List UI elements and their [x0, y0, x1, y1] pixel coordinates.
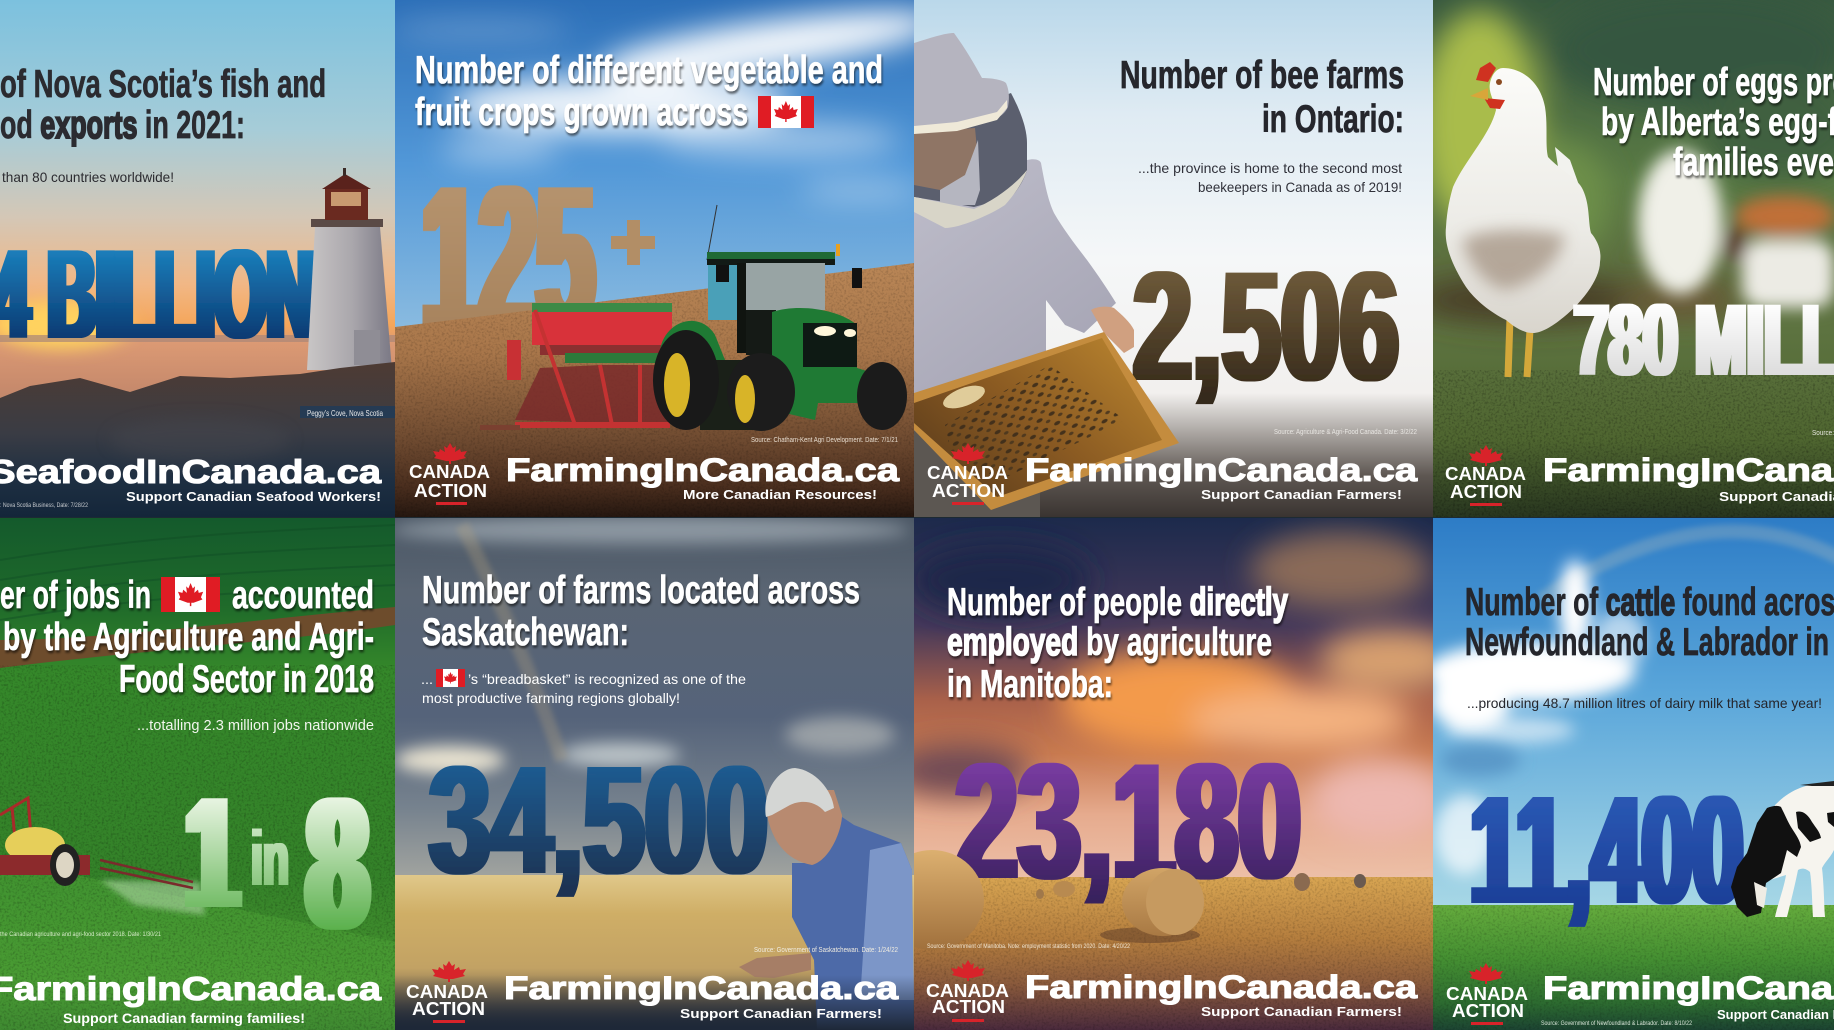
heading: od exports in 2021: [0, 104, 245, 147]
source: the Canadian agriculture and agri-food sector 2018. Date: 1/30/21 [0, 932, 162, 938]
panel: Ontario bee farms [914, 0, 1433, 517]
logo: Canada Action: ACTION [932, 997, 1005, 1017]
heading [947, 581, 1288, 706]
clouds and rainbow [1425, 531, 1834, 875]
logo: Canada Action [409, 443, 490, 505]
brown soil band [0, 607, 395, 668]
heading: in Ontario: [1262, 98, 1404, 141]
panel: Nova Scotia seafood exports [0, 0, 395, 517]
heading: Number of bee farms [1120, 54, 1404, 97]
heading: fruit crops grown across [415, 91, 748, 134]
tagline: More Canadian Resources! [683, 487, 877, 502]
big number: 1 in 8: in [251, 814, 289, 902]
tagline: Support Canadian Farmers! [680, 1006, 882, 1021]
bottom shade [395, 975, 914, 1030]
subheading with flag [421, 669, 746, 706]
logo: Canada Action: CANADA [927, 463, 1008, 483]
subheading: ...the province is home to the second most [1138, 160, 1402, 176]
grass [1433, 905, 1834, 1030]
heading with flag: Food Sector in 2018 [119, 658, 374, 701]
logo: Canada Action [1446, 963, 1528, 1025]
logo: Canada Action: CANADA [1445, 464, 1526, 484]
heading [1593, 61, 1834, 184]
source: Source: Chatham-Kent Agri Development. Date: 7/1/21 [751, 437, 898, 444]
big number: 34,500: 34,500 [429, 734, 768, 906]
subheading: than 80 countries worldwide! [2, 169, 174, 185]
source: : Nova Scotia Business, Date: 7/28/22 [0, 503, 89, 509]
ground texture [1433, 370, 1834, 517]
icon: honeycomb frame with bees [914, 332, 1179, 510]
subheading with flag: ’s “breadbasket” is recognized as one of the [468, 671, 746, 687]
photo caption [300, 406, 395, 418]
logo: Canada Action [1445, 445, 1526, 506]
icon: Canadian flag [161, 577, 220, 612]
tagline: Support Canadian farming families! [63, 1011, 305, 1026]
heading [1122, 59, 1404, 133]
subheading: ...totalling 2.3 million jobs nationwide [137, 717, 374, 734]
heading with flag: er of jobs in [0, 574, 151, 617]
heading: in Manitoba: [947, 663, 1113, 706]
panel: vegetable and fruit crops [390, 0, 942, 517]
soil [395, 263, 914, 517]
heading: Number of people directly [947, 581, 1288, 624]
source: Source: Government of Manitoba. Note: employment statistic from 2020. Date: 4/20/22 [927, 943, 1130, 950]
heading [0, 63, 326, 147]
logo: Canada Action: CANADA [926, 981, 1009, 1001]
icon: Canadian flag [758, 96, 814, 128]
subheading with flag: most productive farming regions globally! [422, 690, 680, 706]
field [914, 877, 1433, 1030]
panel: Newfoundland and Labrador cattle [1425, 518, 1834, 1030]
logo: Canada Action [927, 443, 1008, 505]
logo: Canada Action [926, 960, 1009, 1022]
icon: crop sprayer [0, 798, 205, 915]
photo caption: Peggy’s Cove, Nova Scotia [307, 409, 383, 418]
heading with flag: by the Agriculture and Agri- [3, 616, 374, 659]
icon: dairy cow [1731, 781, 1834, 917]
tagline: Support Canadian Farmers! [1201, 1004, 1402, 1019]
logo: Canada Action: ACTION [1452, 1001, 1524, 1021]
heading: Number of farms located across [422, 569, 860, 612]
icon: green tractor [653, 205, 907, 431]
logo: Canada Action: ACTION [414, 481, 487, 501]
website: FarmingInCanada.ca [1025, 452, 1417, 488]
logo: Canada Action [406, 961, 488, 1023]
big number: 1 in 8: 8 [307, 759, 368, 968]
big number: 1 in 8 [186, 759, 368, 968]
heading: employed by agriculture [947, 621, 1272, 664]
website: FarmingInCanada.ca [506, 452, 899, 488]
heading with flag [0, 574, 374, 701]
heading with flag: accounted [232, 574, 374, 617]
heading: Saskatchewan: [422, 611, 629, 654]
rocks [0, 362, 395, 517]
panel: Manitoba agriculture employment [880, 518, 1460, 1030]
panel: agriculture jobs [0, 518, 395, 1030]
heading [1465, 581, 1834, 664]
logo: Canada Action: CANADA [1446, 984, 1528, 1004]
source: Source: Government of Newfoundland & Labrador. Date: 8/10/22 [1541, 1021, 1693, 1027]
clouds and rainbow [390, 516, 910, 774]
subheading: beekeepers in Canada as of 2019! [1198, 179, 1402, 195]
subheading with flag: ... [421, 671, 433, 687]
tagline: Support Canadian Seafood Workers! [126, 489, 381, 504]
website: FarmingInCanada.ca [504, 970, 898, 1006]
big number: 125+: 125 [422, 145, 594, 368]
icon: lighthouse [307, 168, 392, 370]
icon: beekeeper [914, 33, 1134, 517]
blurred background [1410, 0, 1834, 324]
subheading: ...producing 48.7 million litres of dairy milk that same year! [1467, 695, 1822, 711]
source: Source: Government of Saskatchewan. Date: 1/24/22 [754, 947, 898, 954]
logo: Canada Action: CANADA [409, 462, 490, 482]
big number: 4 BILLION: 4 BILLION [0, 223, 315, 365]
icon: seed drill [480, 303, 672, 430]
wheat field [395, 875, 914, 1030]
icon: white hen [1446, 62, 1600, 377]
sunset clouds [890, 532, 1460, 840]
big number: 23,180: 23,180 [955, 729, 1301, 913]
logo: Canada Action: ACTION [1450, 482, 1522, 502]
source: Source: Agriculture & Agri-Food Canada. Date: 3/2/22 [1274, 429, 1417, 436]
heading [415, 49, 883, 134]
big number: 1 in 8: 1 [186, 765, 238, 941]
heading [422, 569, 860, 654]
subheading [1138, 160, 1402, 195]
logo: Canada Action: ACTION [932, 481, 1005, 501]
blurred chickens [1638, 150, 1834, 308]
panel: Alberta eggs [1410, 0, 1834, 517]
tagline: Support Canadian Farmers! [1201, 487, 1402, 502]
website: FarmingInCanada.ca [1025, 969, 1417, 1005]
icon: farmer [739, 768, 914, 1030]
big number: 2,506: 2,506 [1133, 240, 1399, 414]
clouds [390, 0, 942, 200]
heading: Number of different vegetable and [415, 49, 883, 92]
logo: Canada Action: CANADA [406, 982, 488, 1002]
icon: hay bales [880, 850, 1366, 950]
big number: 125+ [422, 185, 655, 324]
panel: Saskatchewan farms [390, 516, 914, 1030]
logo: Canada Action: ACTION [412, 999, 485, 1019]
heading: of Nova Scotia’s fish and [0, 63, 326, 106]
